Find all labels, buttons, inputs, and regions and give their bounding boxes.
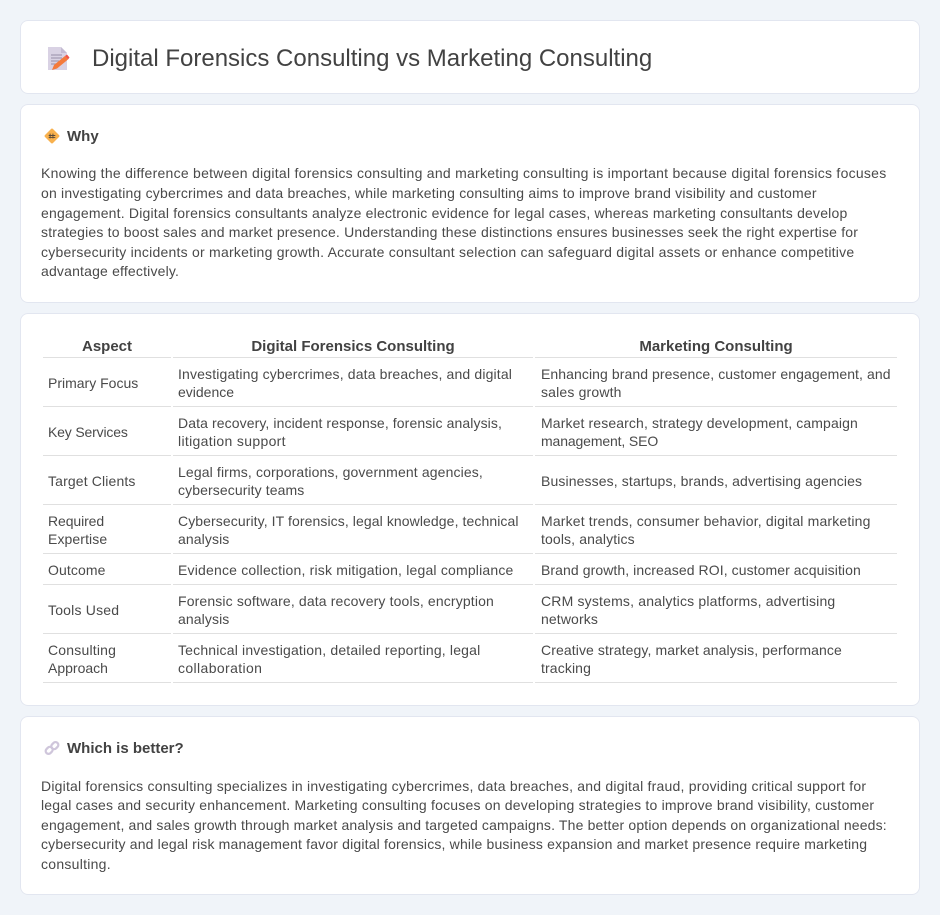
row: required expertise: analysis	[178, 531, 229, 547]
title: Digital Forensics Consulting vs Marketing Consulting	[92, 45, 652, 72]
row: required expertise: Cybersecurity, IT forensics, legal knowledge, technical	[178, 513, 519, 529]
row: primary focus: Investigating cybercrimes, data breaches, and digital	[178, 366, 512, 382]
row: outcome: Outcome	[48, 562, 106, 578]
row: required expertise: tools, analytics	[541, 531, 635, 547]
row: consulting approach	[43, 642, 897, 683]
table header: Aspect	[82, 338, 132, 355]
icon: chain link	[44, 741, 60, 755]
text block: which is better: Digital forensics consulting specializes in investigating cybercrimes, data breaches, and digital fraud, providing critical support for	[41, 778, 866, 794]
text block: which is better	[41, 778, 887, 872]
row: required expertise: Market trends, consumer behavior, digital marketing	[541, 513, 871, 529]
row: tools used: networks	[541, 611, 598, 627]
row: required expertise: Required	[48, 513, 104, 529]
row: primary focus: evidence	[178, 384, 234, 400]
row: outcome	[43, 562, 897, 585]
text block: which is better: legal cases and security enhancement. Marketing consulting focuses on developing strategies to improve brand visibility, customer	[41, 797, 874, 813]
row: target clients: cybersecurity teams	[178, 482, 304, 498]
heading: which is better: Which is better?	[67, 740, 184, 757]
row: key services	[43, 415, 897, 456]
text block: why: strategies to boost sales and market presence. Understanding these distinctions ensures businesses seek the right expertise for	[41, 224, 858, 240]
panel: which is better	[20, 716, 920, 895]
row: tools used: analysis	[178, 611, 229, 627]
row: key services: litigation support	[178, 433, 286, 449]
table header: Marketing Consulting	[639, 338, 793, 355]
panel: comparison table	[20, 313, 920, 706]
row: tools used: Forensic software, data recovery tools, encryption	[178, 593, 494, 609]
icon: document with pencil	[48, 47, 70, 70]
row: required expertise: Expertise	[48, 531, 107, 547]
row: outcome: Evidence collection, risk mitigation, legal compliance	[178, 562, 514, 578]
row: tools used	[43, 593, 897, 634]
row: consulting approach: Creative strategy, market analysis, performance	[541, 642, 842, 658]
text block: why	[41, 165, 886, 279]
row: key services: Key Services	[48, 424, 128, 440]
row: key services: management, SEO	[541, 433, 658, 449]
text block: which is better: cybersecurity and legal risk management favor digital forensics, while business expansion and market presence require marketing	[41, 836, 867, 852]
heading: why: Why	[67, 128, 99, 145]
row: key services: Market research, strategy development, campaign	[541, 415, 858, 431]
row: target clients: Target Clients	[48, 473, 136, 489]
row: target clients	[43, 464, 897, 505]
table header: Digital Forensics Consulting	[251, 338, 455, 355]
row: tools used: CRM systems, analytics platforms, advertising	[541, 593, 835, 609]
table header	[43, 338, 897, 358]
text block: which is better: consulting.	[41, 856, 111, 872]
text block: why: engagement. Digital forensics consultants analyze electronic evidence for legal cases, whereas marketing consultants develop	[41, 205, 847, 221]
row: consulting approach: tracking	[541, 660, 591, 676]
row: consulting approach: collaboration	[178, 660, 262, 676]
panel: why	[20, 104, 920, 303]
text block: why: advantage effectively.	[41, 263, 179, 279]
row: required expertise	[43, 513, 897, 554]
row: consulting approach: Approach	[48, 660, 108, 676]
row: primary focus: Enhancing brand presence, customer engagement, and	[541, 366, 891, 382]
row: target clients: Businesses, startups, brands, advertising agencies	[541, 473, 862, 489]
comparison table	[43, 338, 897, 683]
row: target clients: Legal firms, corporations, government agencies,	[178, 464, 483, 480]
text block: why: cybersecurity incidents or marketing growth. Accurate consultant selection can safeguard digital assets or enhance competitive	[41, 244, 854, 260]
text block: why: Knowing the difference between digital forensics consulting and marketing consulting is important because digital forensics focuses	[41, 165, 886, 181]
row: consulting approach: Consulting	[48, 642, 116, 658]
row: primary focus: sales growth	[541, 384, 622, 400]
row: outcome: Brand growth, increased ROI, customer acquisition	[541, 562, 861, 578]
text block: why: on investigating cybercrimes and data breaches, while marketing consulting aims to improve brand visibility and customer	[41, 185, 817, 201]
row: tools used: Tools Used	[48, 602, 119, 618]
panel: title	[20, 20, 920, 94]
row: key services: Data recovery, incident response, forensic analysis,	[178, 415, 502, 431]
text block: which is better: engagement, and sales growth through market analysis and targeted campaigns. The better option depends on organizational needs:	[41, 817, 887, 833]
icon: diamond sign	[44, 128, 60, 144]
row: primary focus: Primary Focus	[48, 375, 138, 391]
row: consulting approach: Technical investigation, detailed reporting, legal	[178, 642, 480, 658]
row: primary focus	[43, 366, 897, 407]
